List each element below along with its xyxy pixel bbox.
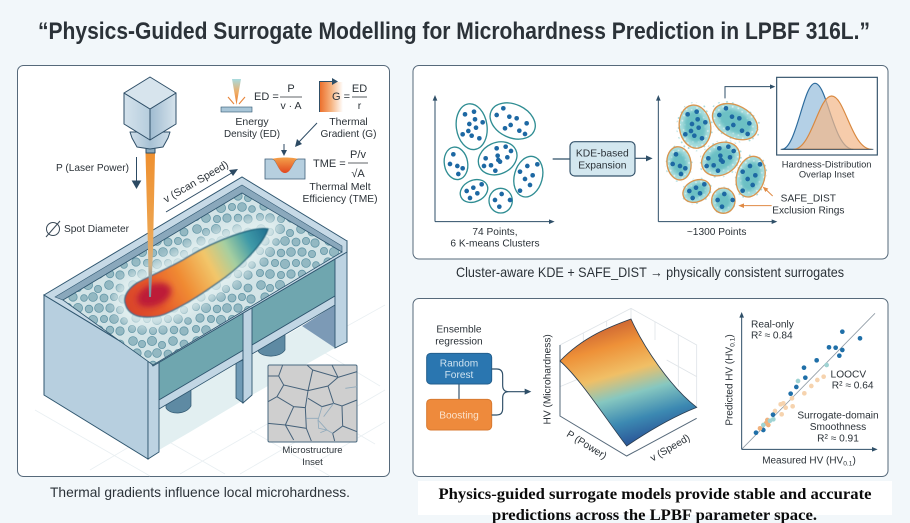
formula: thermal gradient: Gradient (G) <box>320 128 376 140</box>
formula: thermal gradient <box>319 78 376 140</box>
formula: thermal melt efficiency: P/v <box>350 149 366 161</box>
formula: thermal gradient: r <box>358 100 362 112</box>
panel: KDE expansion <box>413 66 888 259</box>
caption: cluster-aware KDE: Cluster-aware KDE + SAFE_DIST → physically consistent surrogates <box>456 264 844 280</box>
conclusion text <box>418 481 892 523</box>
chart: original clusters: 74 Points, <box>472 227 518 238</box>
panel: ensemble regression <box>413 298 888 476</box>
arrow: gradient to melt efficiency <box>295 123 317 147</box>
formula: energy density: v · A <box>280 100 302 112</box>
machine: top rim <box>44 177 347 366</box>
chart: hardness distribution overlap <box>777 77 877 180</box>
machine: lower strip <box>159 296 335 409</box>
formula: thermal gradient: G = <box>332 91 350 103</box>
chart: predicted versus measured: Smoothness <box>810 422 866 433</box>
chart: predicted versus measured: Measured HV (HV <box>762 455 843 466</box>
chart: original clusters <box>433 95 555 250</box>
conclusion text: Physics-guided surrogate models provide stable and accurate <box>438 486 872 503</box>
label: spot diameter <box>46 221 129 237</box>
chart: predicted versus measured: R² ≈ 0.91 <box>817 434 859 445</box>
arrow box: KDE-based expansion: KDE-based <box>576 149 629 160</box>
machine: inner wall <box>55 185 342 300</box>
formula: energy density: Energy <box>235 116 269 128</box>
chart: HV response surface <box>543 308 697 464</box>
microstructure inset <box>268 365 357 468</box>
chart: predicted versus measured: LOOCV <box>831 369 866 380</box>
chart: HV response surface: v (Speed) <box>649 433 692 464</box>
arrow box: KDE-based expansion: Expansion <box>578 160 627 171</box>
chart: predicted versus measured: R² ≈ 0.64 <box>832 381 874 392</box>
formula: thermal melt efficiency: Efficiency (TME) <box>302 193 378 205</box>
powder bed <box>63 193 342 365</box>
callout: SAFE_DIST exclusion rings: SAFE_DIST <box>781 194 836 205</box>
floor grid and shadow <box>35 305 385 476</box>
formula: thermal melt efficiency: Thermal Melt <box>309 181 371 193</box>
chart: predicted versus measured <box>725 312 879 467</box>
ensemble model diagram: Forest <box>445 370 474 381</box>
chart: hardness distribution overlap: Overlap Inset <box>799 170 855 180</box>
formula: thermal gradient: Thermal <box>329 116 368 128</box>
formula: energy density: P <box>287 83 295 95</box>
formula: thermal melt efficiency: TME = <box>313 158 346 170</box>
chart: HV response surface: P (Power) <box>564 429 608 462</box>
caption: thermal gradients: Thermal gradients influence local microhardness. <box>50 484 350 500</box>
label: laser power <box>56 157 140 188</box>
formula: energy density <box>221 79 302 140</box>
chart: predicted versus measured: R² ≈ 0.84 <box>751 331 793 342</box>
formula: energy density: ED = <box>254 91 279 103</box>
formula: thermal melt efficiency <box>265 149 378 205</box>
chart: hardness distribution overlap: Hardness-Distribution <box>782 159 872 169</box>
label: spot diameter: Spot Diameter <box>64 223 129 235</box>
chart: predicted versus measured: Real-only <box>751 319 795 330</box>
machine: teal window <box>159 256 335 400</box>
microstructure inset: Microstructure <box>282 445 343 456</box>
laser beam <box>146 153 155 297</box>
formula: thermal melt efficiency: √A <box>351 168 365 180</box>
chart: predicted versus measured: 0.1 <box>730 337 737 347</box>
chart: predicted versus measured: 0.1 <box>843 460 853 467</box>
ensemble model diagram: Ensemble <box>436 325 482 336</box>
formula: thermal gradient: ED <box>352 83 367 95</box>
microstructure inset: Inset <box>302 457 323 468</box>
ensemble model diagram: Boosting <box>439 411 479 422</box>
chart: HV response surface: HV (Microhardness) <box>543 334 554 424</box>
machine: support feet <box>166 330 285 413</box>
machine: left face <box>44 295 148 459</box>
label: scan speed: v (Scan Speed) <box>162 159 231 206</box>
laser head <box>124 77 176 153</box>
chart: predicted versus measured: ) <box>852 455 856 466</box>
chart: predicted versus measured: Surrogate-domain <box>797 410 879 421</box>
heat glow <box>125 229 268 317</box>
label: laser power: P (Laser Power) <box>56 162 129 174</box>
panel: laser melting process <box>18 66 390 476</box>
arrow: to overlap inset <box>725 84 775 98</box>
chart: expanded surrogate points <box>656 92 777 238</box>
chart: expanded surrogate points: ~1300 Points <box>687 227 746 238</box>
chart: original clusters: 6 K-means Clusters <box>450 239 540 250</box>
callout: SAFE_DIST exclusion rings: Exclusion Rings <box>772 205 844 216</box>
machine: posts <box>148 241 347 459</box>
callout: SAFE_DIST exclusion rings <box>738 187 844 216</box>
chart: predicted versus measured: Predicted HV (HV <box>725 347 736 426</box>
ensemble model diagram: Random <box>440 358 478 369</box>
melt pool <box>125 229 268 317</box>
machine: rear supports <box>236 305 335 403</box>
arrow: into melt cup <box>281 144 287 156</box>
arrow box: KDE-based expansion <box>553 142 653 176</box>
formula: energy density: Density (ED) <box>224 128 280 140</box>
ensemble model diagram: regression <box>435 336 483 347</box>
chart: predicted versus measured: ) <box>725 334 736 338</box>
ensemble model diagram <box>427 325 531 430</box>
